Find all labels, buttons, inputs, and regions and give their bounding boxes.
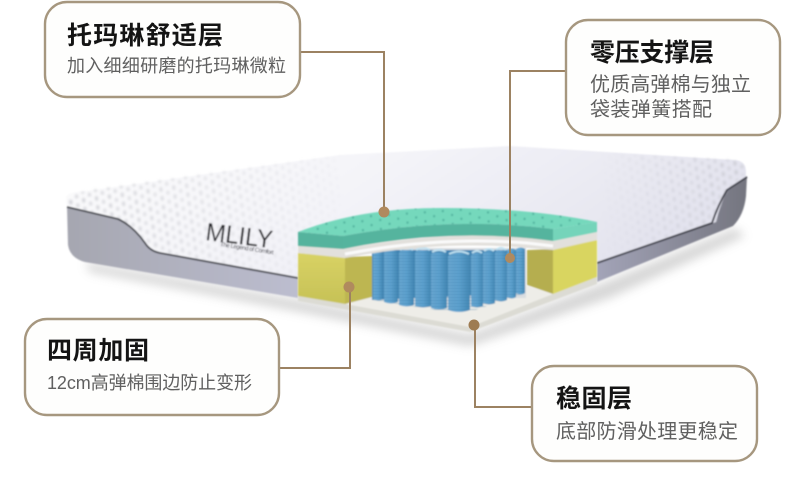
coil striations [373, 250, 525, 312]
spring tops [400, 248, 506, 254]
mattress shadow [85, 228, 745, 346]
pocket springs [372, 248, 525, 312]
mattress top surface [66, 146, 746, 278]
logo text: MLILY [204, 218, 274, 254]
spring [507, 248, 516, 298]
layer right face [553, 222, 597, 241]
left block side [345, 256, 372, 304]
callout box [45, 2, 300, 97]
toprelax green layer [298, 208, 597, 249]
spring [373, 250, 383, 300]
connector: toprelax layer [300, 52, 390, 218]
quilted dot pattern right [656, 158, 744, 237]
right block side [527, 249, 553, 294]
mattress [66, 146, 747, 346]
left edge foam block [298, 253, 372, 304]
bottom stabilizing layer [298, 277, 597, 332]
layer dots [298, 208, 597, 236]
spring back row [372, 250, 525, 300]
callout: toprelax comfort layer [45, 2, 300, 97]
bottom layer top face [345, 285, 553, 327]
connector: stabilizing layer [468, 320, 532, 407]
spring [384, 250, 398, 304]
line [279, 288, 350, 368]
callout heading: 稳固层 [556, 385, 632, 413]
mattress cross-section [298, 208, 597, 332]
spring [431, 252, 447, 310]
line [475, 326, 532, 407]
logo tagline: The Legend of Comfort [220, 242, 274, 256]
spring front [448, 253, 470, 312]
spring [495, 250, 507, 302]
right block front [553, 240, 597, 294]
dot [344, 282, 354, 292]
callout text: 底部防滑处理更稳定 [556, 420, 738, 443]
spring [399, 250, 414, 306]
dot [378, 206, 390, 218]
brand logo [204, 218, 274, 256]
callout heading: 四周加固 [47, 337, 149, 365]
quilted dot pattern [68, 170, 270, 268]
spring [516, 248, 525, 294]
connector: perimeter reinforcement [279, 282, 354, 368]
callout: stabilizing layer [532, 366, 757, 461]
callout: perimeter reinforcement [25, 319, 279, 415]
white support layer [298, 232, 597, 258]
mattress body [66, 146, 747, 298]
mattress right side panel [597, 176, 747, 282]
spring [471, 253, 483, 308]
callout heading: 零压支撑层 [590, 39, 714, 67]
connector: zero pressure layer [505, 71, 566, 263]
callout heading: 托玛琳舒适层 [67, 22, 223, 50]
right edge foam block [527, 240, 597, 294]
left piping [67, 207, 298, 278]
layer front arc face [343, 224, 553, 249]
callout text line 2: 袋装弹簧搭配 [590, 98, 712, 121]
cavity background [372, 248, 526, 298]
callout box [532, 366, 757, 461]
line [510, 71, 566, 258]
callout box [25, 319, 279, 415]
layer left face [298, 232, 343, 249]
dot [505, 253, 515, 263]
line [300, 52, 384, 211]
spring [483, 251, 495, 304]
callout text line 1: 优质高弹棉与独立 [590, 73, 751, 96]
dot [468, 320, 480, 330]
callout box [566, 20, 780, 135]
callout text: 12cm高弹棉围边防止变形 [47, 373, 252, 393]
layer top surface [298, 208, 597, 236]
white layer highlight [345, 241, 553, 254]
left block front [298, 253, 345, 304]
callout: zero pressure support layer [566, 20, 780, 135]
mattress left side panel [67, 206, 298, 298]
spring [415, 250, 431, 308]
right piping [597, 177, 747, 263]
callout text: 加入细细研磨的托玛琳微粒 [67, 56, 286, 76]
